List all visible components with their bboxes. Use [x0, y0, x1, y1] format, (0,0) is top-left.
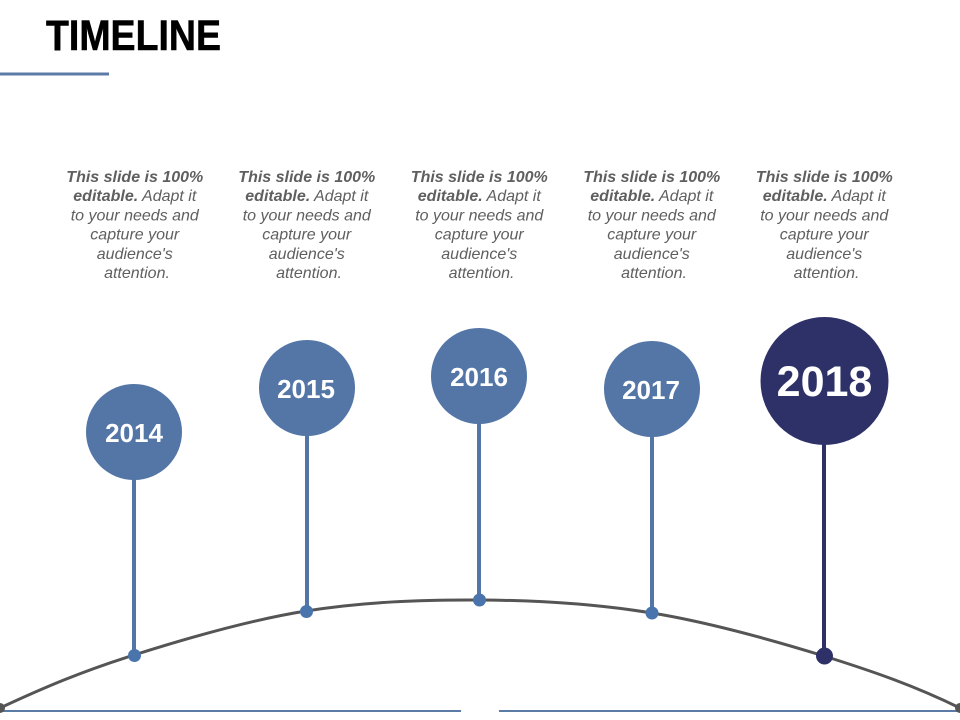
text block: 2018: editable. Adapt it	[763, 188, 886, 205]
milestone 2014: 2014	[105, 418, 163, 448]
text block: 2018: This slide is 100%	[756, 169, 893, 186]
bottom baseline right	[499, 710, 960, 712]
text block: 2014: attention.	[104, 265, 170, 282]
text block: 2017: attention.	[621, 265, 687, 282]
text block: 2016: This slide is 100%	[411, 169, 548, 186]
text block: 2018: attention.	[794, 265, 859, 282]
text block: 2014: to your needs and	[71, 207, 200, 224]
milestone 2018	[760, 317, 888, 664]
text block: 2018: audience's	[786, 246, 862, 263]
text block: 2016: editable. Adapt it	[418, 188, 541, 205]
text block: 2017: capture your	[607, 227, 697, 244]
text block: 2017: audience's	[614, 246, 690, 263]
text block: 2014: This slide is 100%	[66, 169, 203, 186]
arc end dot: left	[0, 703, 5, 713]
milestone 2015	[259, 340, 355, 618]
text block: 2014: audience's	[97, 246, 173, 263]
title: TIMELINE	[46, 12, 221, 60]
milestone 2017: 2017	[622, 375, 680, 405]
text block: 2015: This slide is 100%	[238, 169, 375, 186]
text block: 2014: capture your	[90, 227, 180, 244]
arc end dot: right	[955, 703, 960, 713]
milestone 2017	[604, 341, 700, 620]
text block: 2015: editable. Adapt it	[245, 188, 368, 205]
milestone 2016	[431, 328, 527, 606]
text block: 2017: This slide is 100%	[583, 169, 720, 186]
text block: 2015: to your needs and	[243, 207, 372, 224]
text block: 2017: editable. Adapt it	[590, 188, 713, 205]
text block: 2017: to your needs and	[588, 207, 717, 224]
title underline	[0, 72, 109, 76]
text block: 2016: to your needs and	[415, 207, 544, 224]
milestone 2018: 2018	[777, 358, 872, 406]
arc curve	[0, 600, 960, 713]
text block: 2018: capture your	[780, 227, 869, 244]
text block: 2016: capture your	[435, 227, 524, 244]
milestone 2016: 2016	[450, 362, 508, 392]
bottom baseline left	[0, 710, 461, 712]
text block: 2016: attention.	[449, 265, 514, 282]
milestone 2014	[86, 384, 182, 662]
text block: 2015: audience's	[269, 246, 345, 263]
text block: 2016: audience's	[441, 246, 517, 263]
text block: 2014: editable. Adapt it	[73, 188, 196, 205]
milestone 2015: 2015	[277, 374, 335, 404]
text block: 2015: capture your	[262, 227, 352, 244]
text block: 2015: attention.	[276, 265, 342, 282]
text block: 2018: to your needs and	[760, 207, 889, 224]
